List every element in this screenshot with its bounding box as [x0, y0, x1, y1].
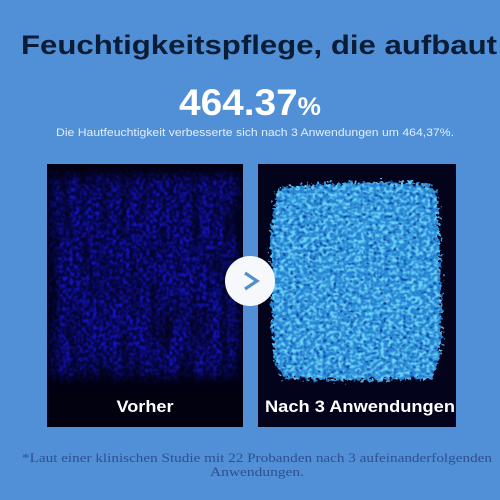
icon: arrow button [225, 256, 275, 306]
headline stat: 464.37% [179, 82, 321, 123]
before label: Vorher [116, 397, 174, 416]
after label: Nach 3 Anwendungen [265, 397, 455, 416]
before image background [47, 164, 243, 427]
after moisture texture [267, 178, 445, 384]
after image background [258, 164, 456, 427]
title: Feuchtigkeitspflege, die aufbaut [21, 30, 497, 60]
stat description: Die Hautfeuchtigkeit verbesserte sich nach 3 Anwendungen um 464,37%. [56, 127, 454, 139]
before moisture texture [47, 166, 243, 386]
footnote: *Laut einer klinischen Studie mit 22 Probanden nach 3 aufeinanderfolgenden [22, 451, 493, 465]
footnote [22, 451, 493, 479]
footnote: Anwendungen. [210, 465, 304, 479]
panel: after [258, 164, 456, 427]
panel: before [47, 164, 243, 427]
